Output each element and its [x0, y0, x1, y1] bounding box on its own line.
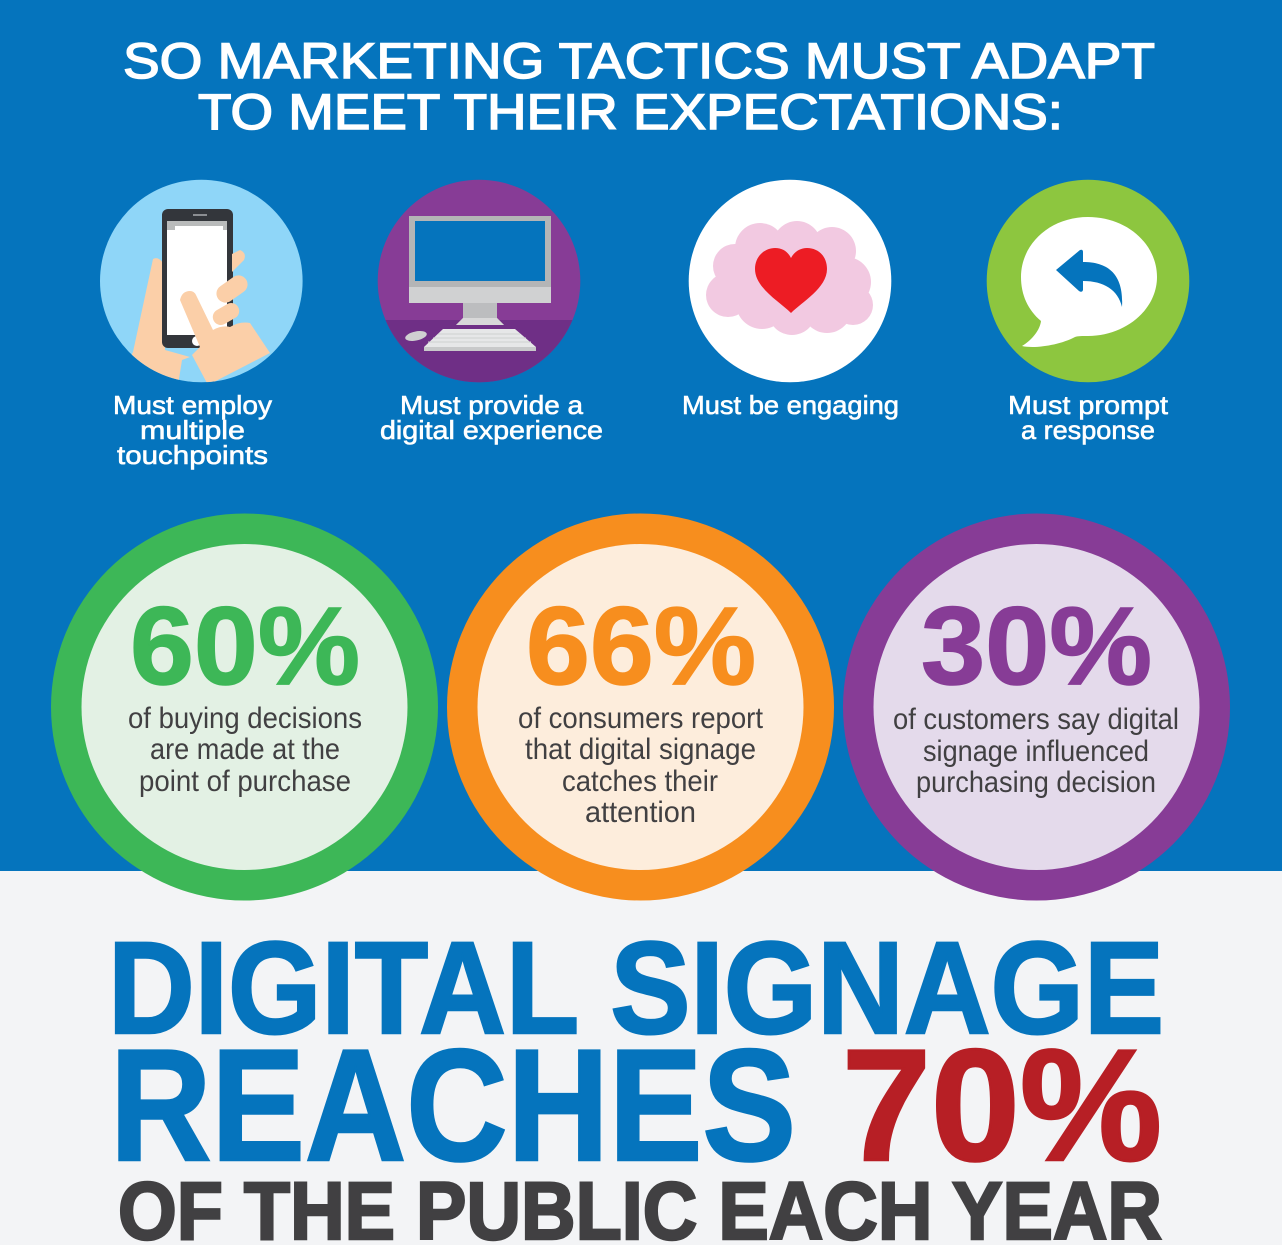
stat: 66%: attention	[585, 796, 696, 829]
caption: engaging: Must be engaging	[682, 390, 899, 420]
icon: heart on cloud	[689, 180, 891, 382]
stat: 30%: signage influenced	[923, 735, 1149, 768]
caption: response: a response	[1021, 415, 1155, 445]
stat: 66%: 66%	[526, 585, 756, 708]
stat: 66%	[447, 514, 834, 900]
title: TO MEET THEIR EXPECTATIONS:	[198, 84, 1063, 140]
headline: REACHES	[110, 1016, 796, 1194]
title: SO MARKETING TACTICS MUST ADAPT	[123, 33, 1155, 89]
stat: 66%: catches their	[562, 765, 718, 798]
caption: touchpoints: Must employ	[113, 390, 272, 420]
stat: 60%: 60%	[130, 585, 360, 708]
stat: 66%: that digital signage	[525, 733, 756, 766]
icon: desktop computer	[378, 180, 580, 382]
stat: 30%	[843, 514, 1230, 900]
stat: 30%: purchasing decision	[916, 766, 1156, 799]
title	[123, 33, 1155, 140]
caption: touchpoints: touchpoints	[117, 440, 268, 470]
stat: 30%: of customers say digital	[893, 703, 1179, 736]
icon: reply speech bubble	[987, 180, 1189, 382]
icon: phone in hands	[100, 180, 303, 385]
stat: 60%	[51, 514, 438, 900]
headline: DIGITAL SIGNAGE	[108, 914, 1164, 1061]
stat: 60%: are made at the	[150, 733, 340, 766]
stat: 60%: of buying decisions	[128, 702, 362, 735]
headline	[108, 914, 1164, 1245]
caption: touchpoints: multiple	[140, 415, 245, 445]
headline: 70%	[842, 1016, 1162, 1194]
caption: touchpoints	[113, 390, 272, 470]
caption: response	[1008, 390, 1169, 445]
caption: response: Must prompt	[1008, 390, 1169, 420]
stat: 30%: 30%	[921, 585, 1152, 708]
caption: digital experience	[380, 390, 603, 445]
caption: digital experience: Must provide a	[400, 390, 584, 420]
stat: 66%: of consumers report	[518, 702, 763, 735]
stat: 60%: point of purchase	[139, 765, 351, 798]
caption: digital experience: digital experience	[380, 415, 603, 445]
